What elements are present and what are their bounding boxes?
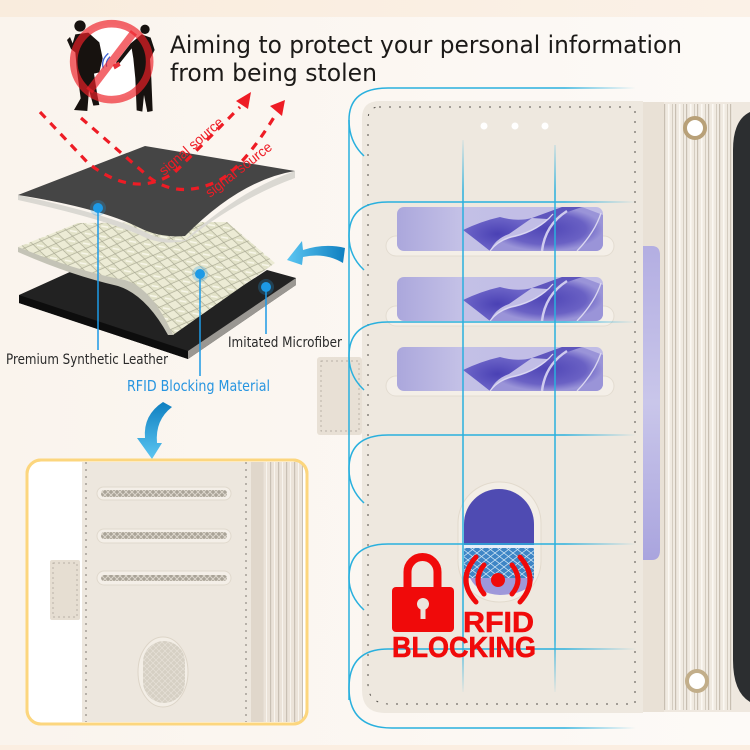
blue guide lines <box>349 88 636 728</box>
spine <box>643 102 750 712</box>
camera oval <box>138 637 188 707</box>
label: RFID <box>463 607 534 639</box>
layer: RFID blocking mesh <box>18 222 275 335</box>
card 2 <box>397 277 603 321</box>
label <box>392 607 536 664</box>
heading: Aiming to protect your personal information <box>170 31 682 59</box>
material labels <box>6 335 342 395</box>
icon: padlock <box>392 557 454 632</box>
heading: from being stolen <box>170 59 377 87</box>
label: BLOCKING <box>392 632 536 664</box>
signal source labels <box>155 114 275 200</box>
card slots <box>386 236 614 396</box>
panel: outer wallet view <box>27 460 307 724</box>
material labels: Imitated Microfiber <box>228 335 342 351</box>
arrow: to layers <box>287 241 345 265</box>
layer: imitated microfiber <box>19 270 296 359</box>
bottom band <box>0 745 750 750</box>
panel: wallet photo <box>317 101 750 713</box>
signal source labels: signal source <box>202 138 275 200</box>
callout pointers <box>90 200 274 376</box>
red signal arrows <box>40 107 276 190</box>
arrowheads <box>236 92 285 116</box>
closed wallet front <box>82 462 251 722</box>
purple inner card edge <box>643 246 660 560</box>
camera window <box>458 482 541 602</box>
card slots <box>97 487 231 585</box>
snap dots <box>480 122 548 130</box>
grommets <box>685 118 705 138</box>
icon: signal <box>466 557 530 602</box>
layer: synthetic leather <box>18 146 295 243</box>
RFID blocking badge <box>392 557 536 664</box>
icon: no skimming sign <box>67 20 155 112</box>
strap tab <box>50 560 80 620</box>
arrow: to closed view <box>137 402 172 459</box>
phone <box>733 112 750 702</box>
card 3 <box>397 347 603 391</box>
heading <box>170 31 682 87</box>
strap <box>317 357 362 435</box>
signal source labels: signal source <box>155 114 226 178</box>
top band <box>0 0 750 17</box>
material labels: Premium Synthetic Leather <box>6 352 168 368</box>
card 1 <box>397 207 603 251</box>
material labels: RFID Blocking Material <box>127 377 270 395</box>
front flap <box>362 101 643 713</box>
